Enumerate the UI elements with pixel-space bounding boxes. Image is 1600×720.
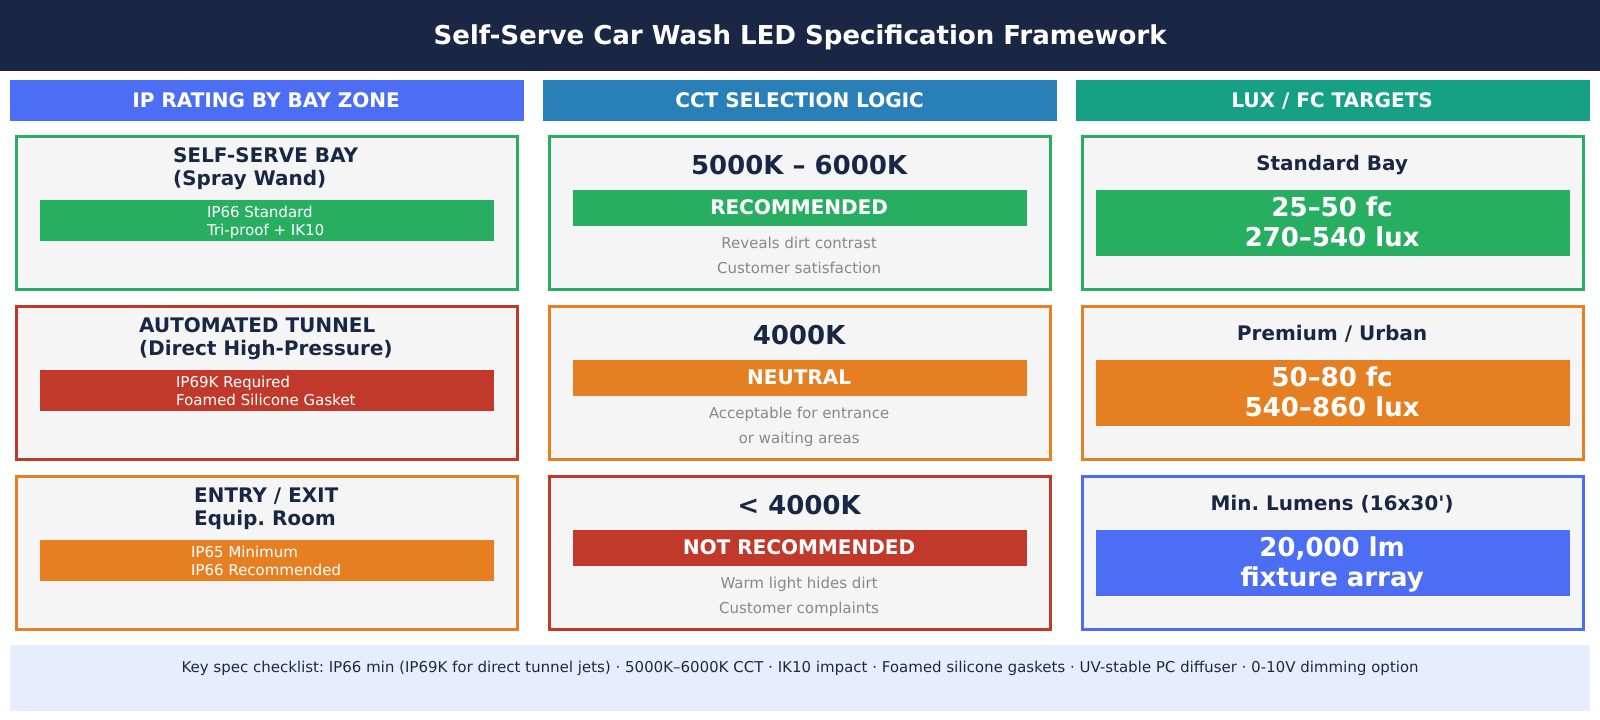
- notes: or waiting areas: [739, 429, 860, 447]
- notes: Customer satisfaction: [717, 259, 881, 277]
- value block: 20,000 lm: [1259, 533, 1405, 563]
- badge: recommended: RECOMMENDED: [710, 195, 888, 219]
- notes: Customer complaints: [719, 599, 879, 617]
- value block: 50–80 fc: [1271, 363, 1393, 393]
- panel: 4000K: [550, 306, 1050, 460]
- heading: entry / exit: [194, 483, 339, 530]
- badge: not recommended: NOT RECOMMENDED: [683, 535, 915, 559]
- value block: fixture array: [1240, 563, 1424, 593]
- CCT value: 4000K: [753, 321, 846, 351]
- title banner: [0, 0, 1600, 71]
- footer checklist: Key spec checklist: IP66 min (IP69K for direct tunnel jets) · 5000K–6000K CCT · IK10 impact · Foamed silicone gaskets · UV-stable PC diffuser · 0-10V dimming option: [181, 658, 1419, 676]
- heading: self-serve bay: [173, 143, 359, 190]
- label: Standard Bay: [1256, 151, 1408, 175]
- panel: minimum lumens: [1082, 476, 1584, 630]
- notes: [717, 234, 881, 277]
- value block: 25–50 fc: [1271, 193, 1393, 223]
- panel: self-serve bay: [16, 136, 518, 290]
- heading: entry / exit: ENTRY / EXIT: [194, 483, 339, 507]
- value block: [1096, 530, 1570, 596]
- column heading: CCT selection: [543, 80, 1057, 121]
- notes: [709, 404, 889, 447]
- title banner: Self-Serve Car Wash LED Specification Framework: [433, 21, 1167, 51]
- notes: Acceptable for entrance: [709, 404, 889, 422]
- notes: Warm light hides dirt: [720, 574, 878, 592]
- badge: recommended: [573, 190, 1027, 226]
- heading: self-serve bay: (Spray Wand): [173, 166, 326, 190]
- column heading: IP rating: [10, 80, 524, 121]
- value block: [1096, 190, 1570, 256]
- CCT value: < 4000K: [737, 491, 862, 521]
- rating bar: IP65: IP65 Minimum: [191, 543, 298, 561]
- column heading: lux targets: LUX / FC TARGETS: [1231, 88, 1433, 112]
- badge: not recommended: [573, 530, 1027, 566]
- label: Min. Lumens (16x30'): [1210, 491, 1454, 515]
- heading: automated tunnel: (Direct High-Pressure): [139, 336, 393, 360]
- panel: standard bay: [1082, 136, 1584, 290]
- rating bar: IP69K: Foamed Silicone Gasket: [176, 391, 356, 409]
- rating bar: IP65: [40, 540, 494, 581]
- rating bar: IP66: IP66 Standard: [207, 203, 313, 221]
- heading: self-serve bay: SELF-SERVE BAY: [173, 143, 359, 167]
- heading: automated tunnel: [139, 313, 393, 360]
- panel: automated tunnel: [16, 306, 518, 460]
- badge: neutral: [573, 360, 1027, 396]
- badge: neutral: NEUTRAL: [747, 365, 851, 389]
- panel: below 4000K: [550, 476, 1050, 630]
- panel: premium / urban: [1082, 306, 1584, 460]
- value block: [1096, 360, 1570, 426]
- footer checklist: [10, 645, 1590, 711]
- notes: [719, 574, 879, 617]
- rating bar: IP65: IP66 Recommended: [191, 561, 341, 579]
- rating bar: IP69K: [40, 370, 494, 411]
- panel: 5000K-6000K: [550, 136, 1050, 290]
- value block: 270–540 lux: [1245, 223, 1420, 253]
- panel: entry / exit: [16, 476, 518, 630]
- rating bar: IP66: [40, 200, 494, 241]
- notes: Reveals dirt contrast: [721, 234, 877, 252]
- label: Premium / Urban: [1237, 321, 1427, 345]
- heading: automated tunnel: AUTOMATED TUNNEL: [139, 313, 375, 337]
- value block: 540–860 lux: [1245, 393, 1420, 423]
- rating bar: IP69K: IP69K Required: [176, 373, 290, 391]
- column heading: CCT selection: CCT SELECTION LOGIC: [675, 88, 924, 112]
- column heading: lux targets: [1076, 80, 1590, 121]
- CCT value: 5000K – 6000K: [691, 151, 908, 181]
- heading: entry / exit: Equip. Room: [194, 506, 336, 530]
- rating bar: IP66: Tri-proof + IK10: [206, 221, 324, 239]
- column heading: IP rating: IP RATING BY BAY ZONE: [132, 88, 400, 112]
